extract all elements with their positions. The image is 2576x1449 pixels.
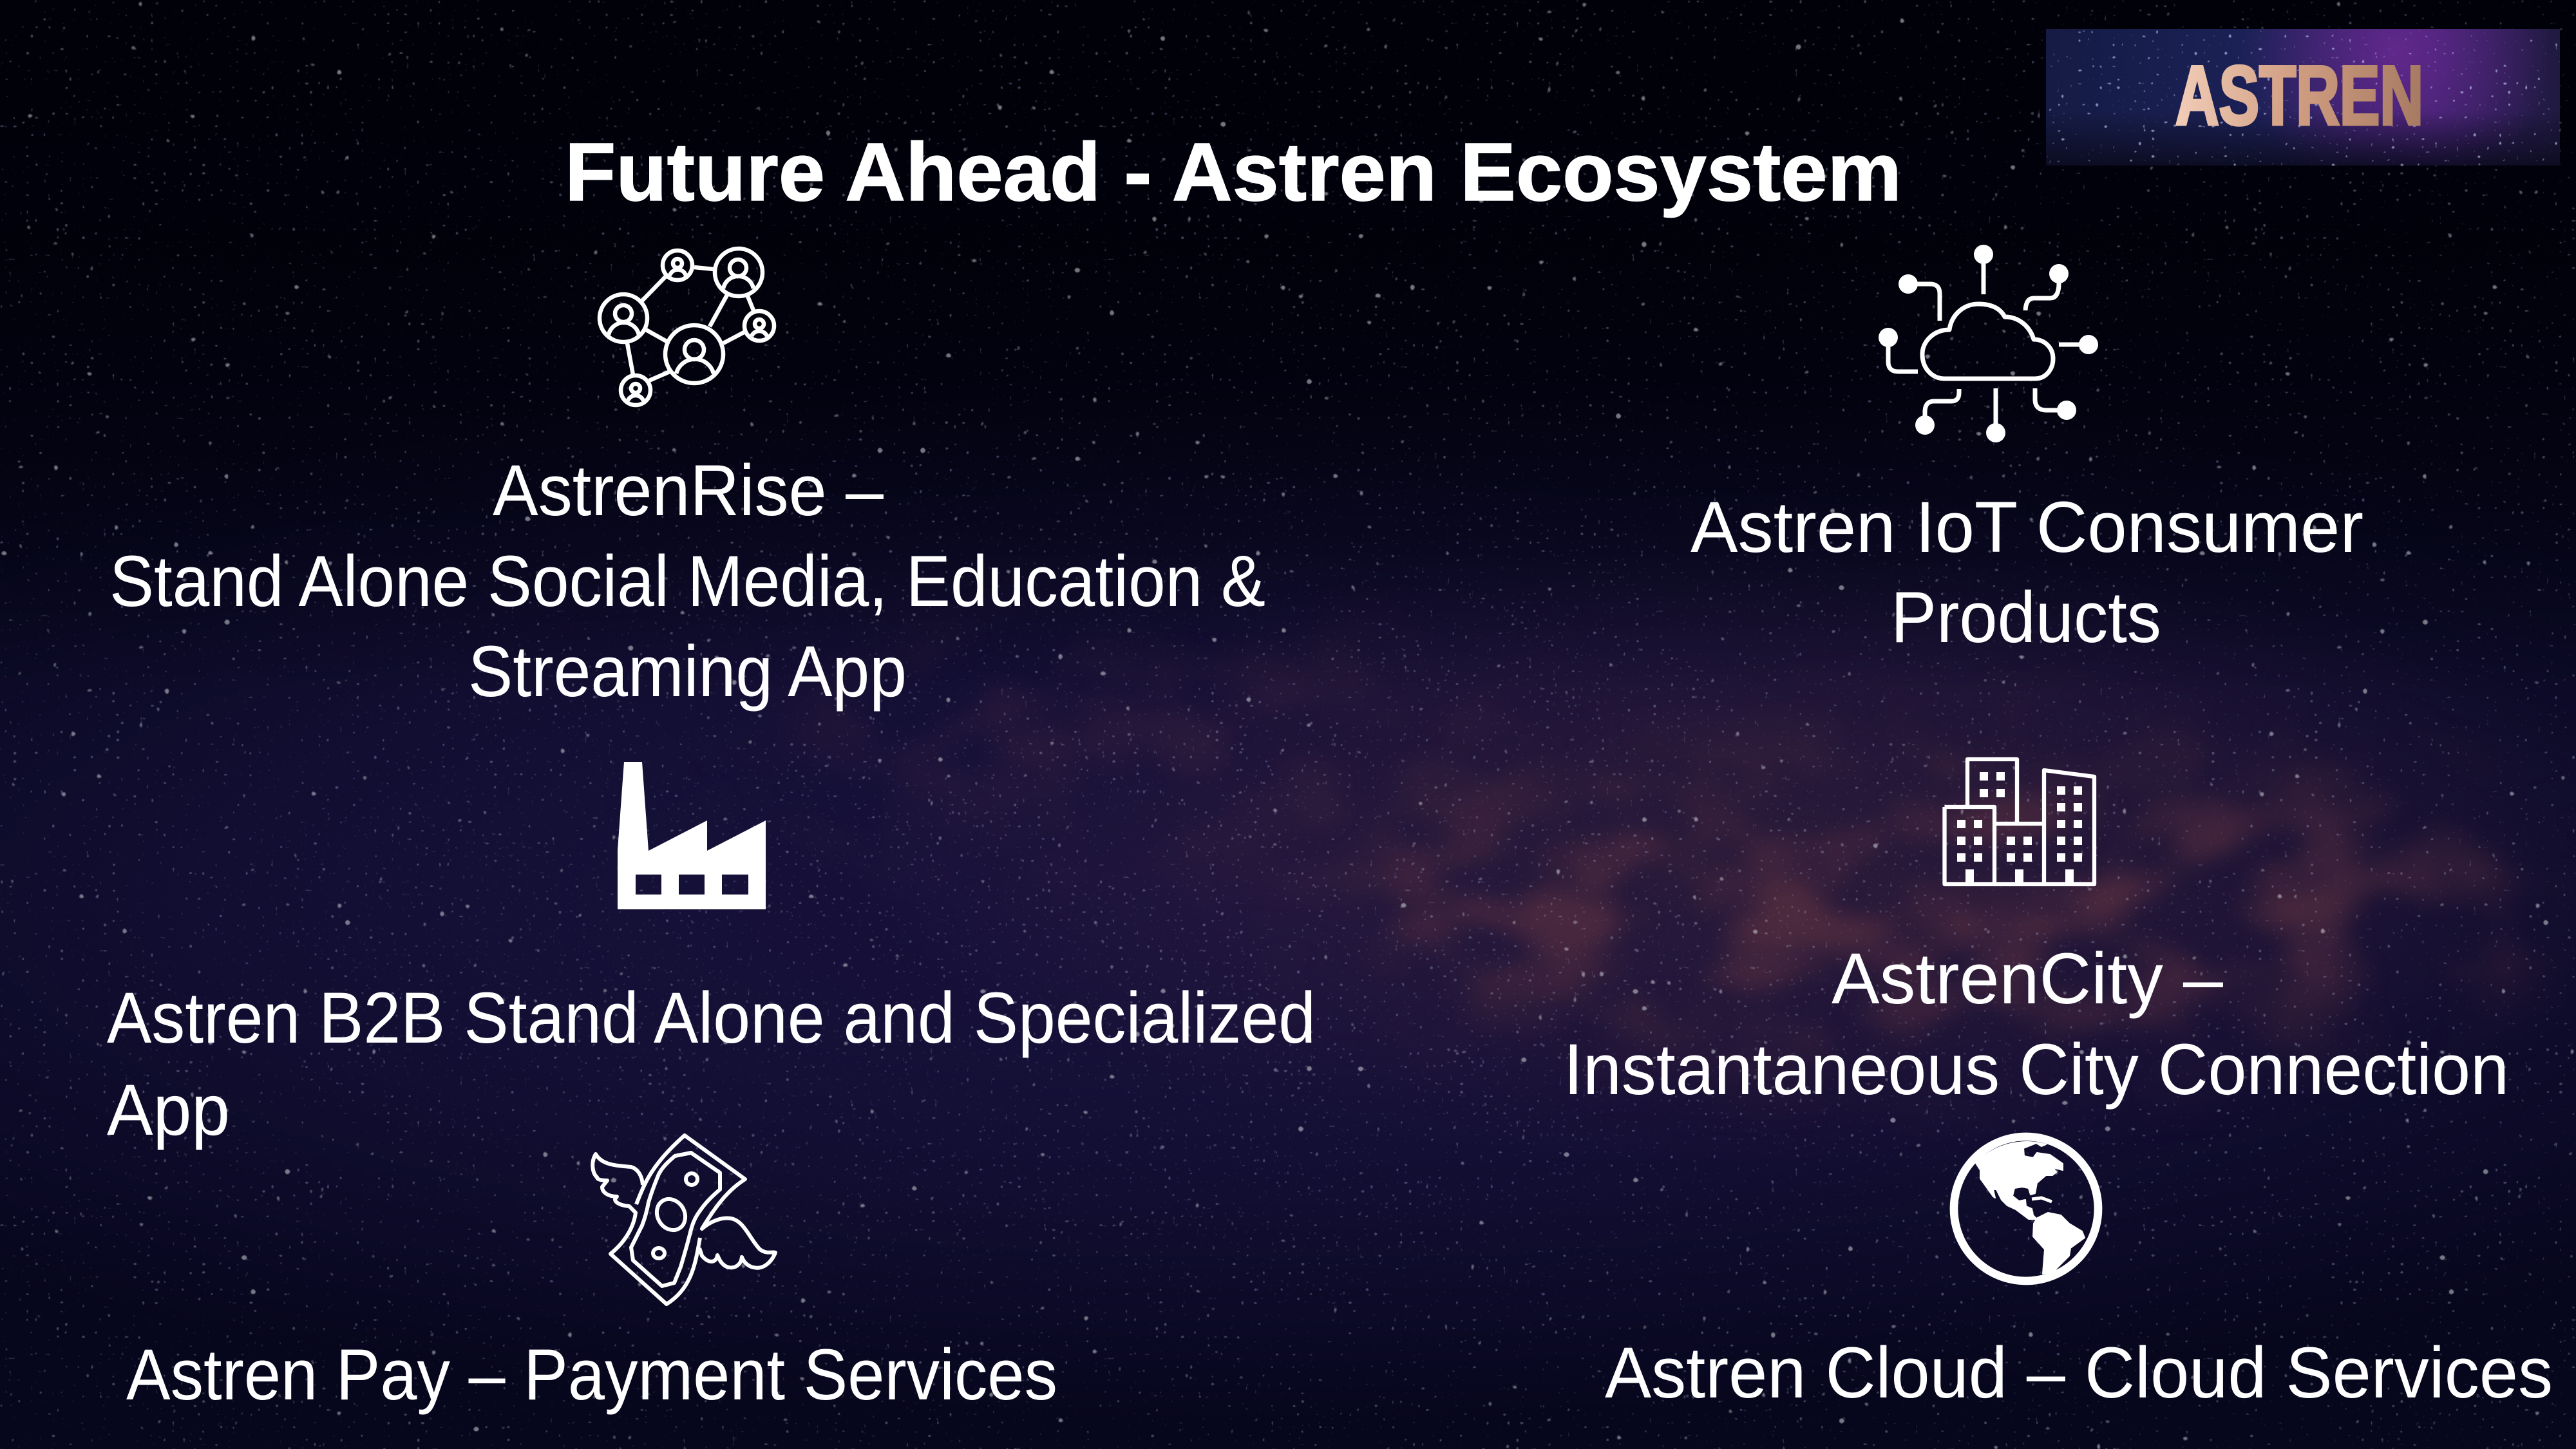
panel: AstrenCity bbox=[1564, 759, 2509, 1110]
text: AstrenCity description bbox=[1564, 938, 2509, 1110]
panel: Astren IoT bbox=[1690, 245, 2363, 658]
text: AstrenRise description bbox=[109, 450, 1265, 712]
text: Astren Pay description: Astren Pay – Payment Services bbox=[126, 1334, 1057, 1415]
text: Astren IoT description bbox=[1690, 487, 2363, 658]
text: AstrenRise description: AstrenRise – bbox=[493, 450, 884, 531]
text: Astren IoT description: Products bbox=[1891, 577, 2161, 658]
text: Astren Cloud description: Astren Cloud – Cloud Services bbox=[1605, 1332, 2553, 1413]
icon: globe bbox=[1954, 1137, 2098, 1281]
logo: Astren badge bbox=[2046, 29, 2560, 166]
panel: Astren B2B bbox=[107, 762, 1316, 1150]
panel: AstrenRise bbox=[109, 249, 1265, 712]
panel: Astren Pay bbox=[126, 1135, 1057, 1415]
text: Astren B2B description: App bbox=[107, 1070, 230, 1150]
text: AstrenCity description: AstrenCity – bbox=[1832, 938, 2224, 1019]
text: AstrenRise description: Stand Alone Social Media, Education & bbox=[109, 541, 1265, 621]
icon: city buildings bbox=[1945, 759, 2094, 884]
icon: cloud with connected nodes bbox=[1879, 245, 2098, 442]
logo: Astren badge: ASTREN bbox=[2175, 48, 2423, 142]
title: Future Ahead - Astren Ecosystem bbox=[565, 126, 1902, 218]
icon: factory bbox=[618, 762, 766, 909]
text: AstrenCity description: Instantaneous City Connection bbox=[1564, 1029, 2509, 1110]
text: Astren B2B description: Astren B2B Stand Alone and Specialized bbox=[107, 978, 1316, 1058]
panel: Astren Cloud bbox=[1605, 1137, 2553, 1413]
text: AstrenRise description: Streaming App bbox=[468, 631, 907, 712]
text: Astren IoT description: Astren IoT Consumer bbox=[1690, 487, 2363, 567]
text: Astren B2B description bbox=[107, 978, 1316, 1150]
icon: social network of people bbox=[600, 249, 774, 405]
icon: flying money bill with wings bbox=[592, 1135, 775, 1304]
